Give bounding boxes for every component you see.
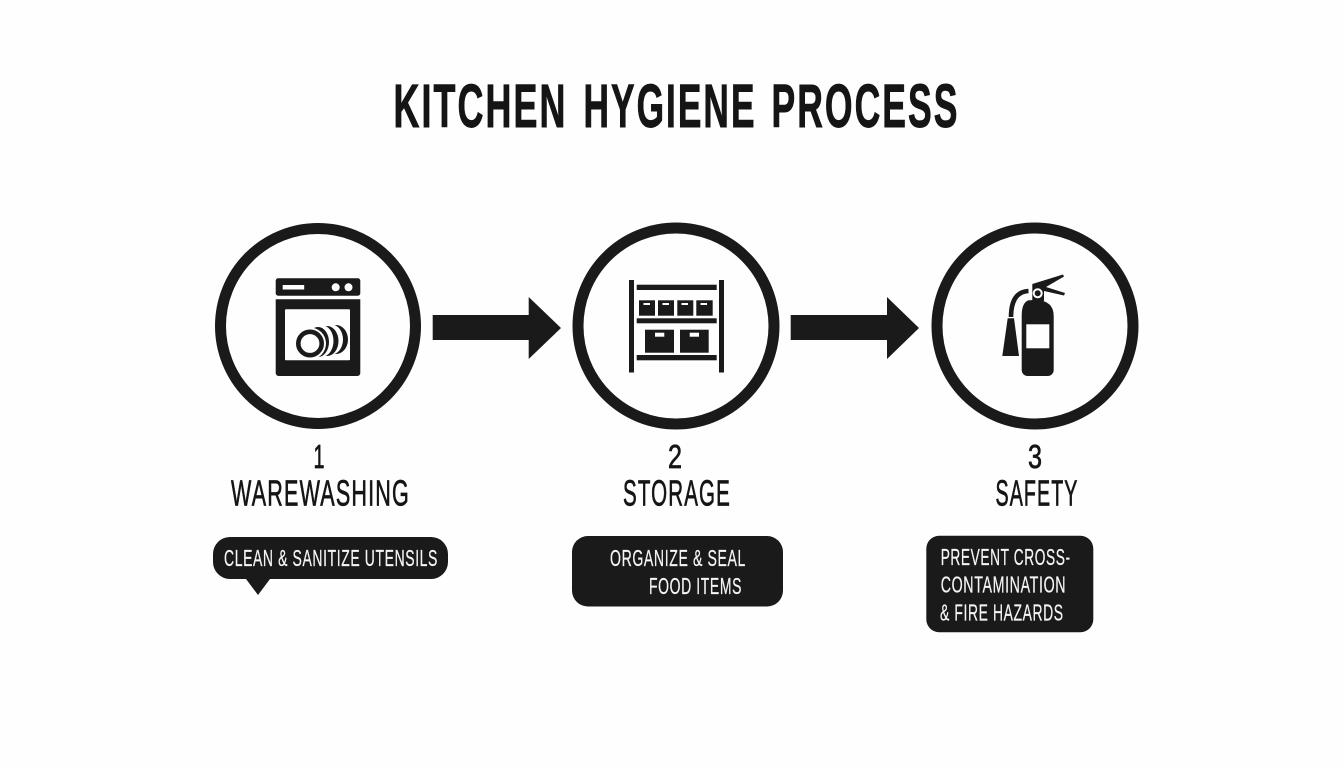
step label: storage: STORAGE <box>623 472 731 514</box>
callout: prevent cross-contamination: & FIRE HAZARDS <box>940 600 1064 626</box>
title <box>394 72 960 140</box>
title: HYGIENE <box>584 72 756 140</box>
step number 2: 2 <box>668 438 682 475</box>
circle 3 <box>937 228 1133 424</box>
step 2: storage <box>572 228 783 606</box>
step number 1: 1 <box>314 438 324 475</box>
callout: prevent cross-contamination: CONTAMINATION <box>941 571 1066 597</box>
arrow 2 to 3 <box>791 297 919 359</box>
callout: organize and seal: FOOD ITEMS <box>649 573 742 599</box>
icon: fire extinguisher <box>1002 274 1065 376</box>
callout: prevent cross-contamination: PREVENT CROSS- <box>941 544 1071 570</box>
step label: safety: SAFETY <box>996 472 1078 514</box>
circle 2 <box>578 228 774 424</box>
callout: clean and sanitize: CLEAN & SANITIZE UTENSILS <box>224 545 438 571</box>
title: KITCHEN <box>394 72 568 140</box>
step number 3: 3 <box>1028 438 1042 475</box>
callout: prevent cross-contamination <box>926 536 1093 632</box>
step 3: safety <box>926 228 1133 632</box>
icon: storage shelves <box>629 280 724 372</box>
callout: clean and sanitize <box>213 537 448 595</box>
circle 1 <box>220 228 416 424</box>
arrow 1 to 2 <box>433 297 561 359</box>
step label: warewashing: WAREWASHING <box>231 472 410 514</box>
title: PROCESS <box>772 72 960 140</box>
step 1: warewashing <box>213 228 448 595</box>
callout: organize and seal <box>572 536 783 606</box>
icon: dishwasher <box>276 278 360 376</box>
callout: organize and seal: ORGANIZE & SEAL <box>610 545 746 571</box>
